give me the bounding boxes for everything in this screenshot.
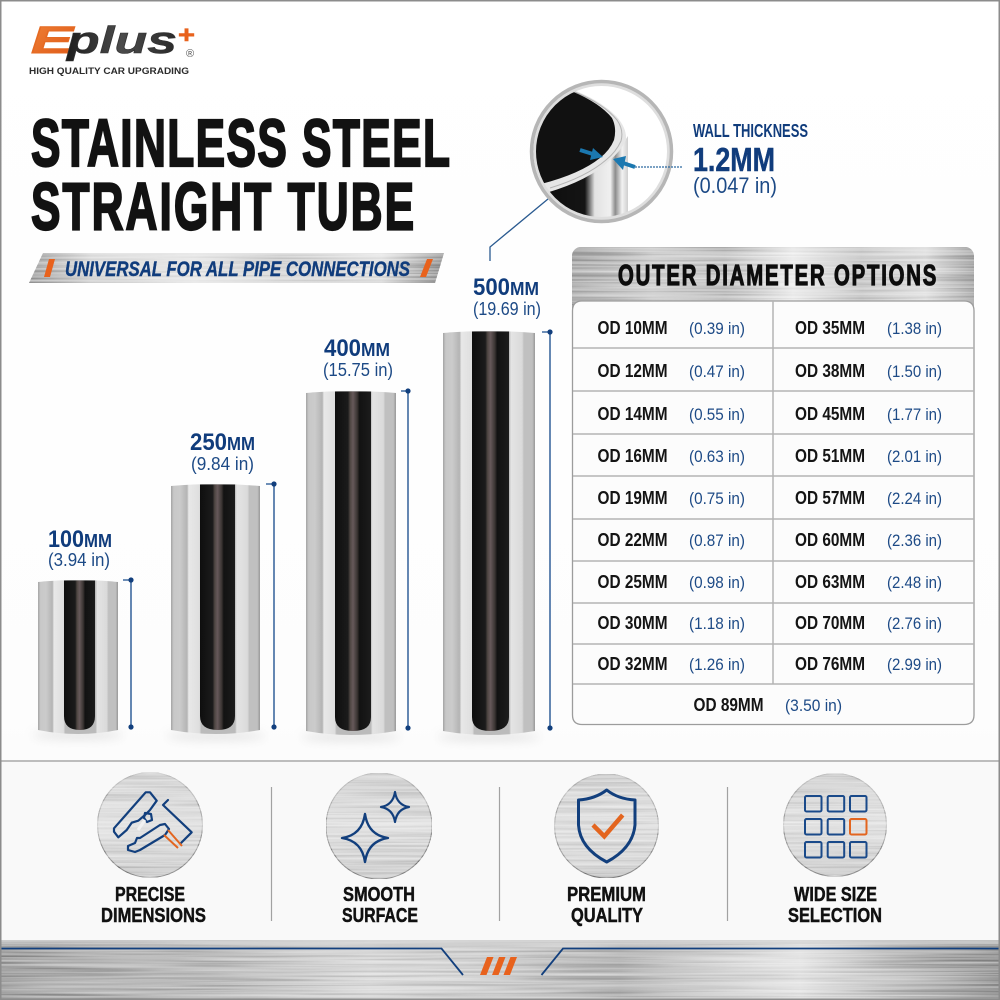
wall thickness callout [693,121,808,198]
left column sizes [598,318,745,674]
right column sizes: (2.24 in) [887,489,942,508]
right column sizes: OD 35MM [795,318,865,338]
left column sizes: (1.18 in) [689,614,745,633]
label: 500mm: (19.69 in) [473,298,541,319]
label: SMOOTH [343,884,415,906]
label: 500mm: MM [510,278,539,299]
table body [572,301,974,724]
dimension line: 100mm [123,577,134,730]
right column sizes: (2.76 in) [887,614,942,633]
label: SURFACE [342,905,418,927]
last row size: (3.50 in) [785,696,842,715]
label: 250mm: (9.84 in) [191,453,254,474]
right column sizes: OD 60MM [795,530,865,550]
right column sizes: (1.77 in) [887,405,942,424]
wall thickness callout: 1.2MM [693,141,775,178]
label: DIMENSIONS [101,905,206,927]
logo: E [31,20,76,62]
wall thickness arrows [580,148,683,170]
banner: universal fit: UNIVERSAL FOR ALL PIPE CONNECTIONS [65,257,411,281]
title [31,107,451,245]
left column sizes: OD 10MM [598,318,668,338]
label [101,884,206,927]
left column sizes: (0.47 in) [689,362,745,381]
left column sizes: OD 22MM [598,530,668,550]
left column sizes: (0.39 in) [689,319,745,338]
right column sizes [795,318,942,674]
tube: 250mm [171,484,260,734]
label: 400mm: 400 [324,335,361,362]
label: SELECTION [788,905,882,927]
icon: size grid [784,774,886,876]
left column sizes: (0.75 in) [689,489,745,508]
dimension line: 250mm [266,481,277,730]
logo [29,20,195,77]
icon: sparkles [326,773,432,879]
left column sizes: (0.55 in) [689,405,745,424]
dimension line: 400mm [401,388,411,731]
left column sizes: OD 19MM [598,488,668,508]
last row size: OD 89MM [694,695,764,715]
logo: ® [186,48,194,60]
logo: HIGH QUALITY CAR UPGRADING [29,66,189,77]
footer band [0,940,1000,1000]
label: PRECISE [115,884,185,906]
label: 500mm [473,274,541,319]
left column sizes: OD 14MM [598,404,668,424]
right column sizes: OD 57MM [795,488,865,508]
icon: orange slashes [480,957,517,975]
panel header [572,247,974,317]
icon: shield [554,774,658,878]
left column sizes: OD 30MM [598,613,668,633]
right column sizes: (1.50 in) [887,362,942,381]
label: 100mm: 100 [48,526,84,553]
right column sizes: OD 76MM [795,654,865,674]
tube: 100mm [38,580,118,734]
zoom lens: wall cross-section [525,82,672,225]
label: 250mm [190,429,255,474]
title: STRAIGHT TUBE [31,170,416,245]
label: QUALITY [571,905,644,927]
label: 400mm: MM [361,339,390,360]
label: 250mm: MM [227,433,255,454]
left column sizes: OD 12MM [598,361,668,381]
right column sizes: OD 51MM [795,446,865,466]
label [567,884,646,927]
label: 100mm [48,526,112,570]
feature: smooth surface [326,773,432,927]
right column sizes: OD 45MM [795,404,865,424]
right column sizes: (1.38 in) [887,319,942,338]
wall thickness callout: (0.047 in) [693,173,777,198]
feature: wide size selection [784,774,886,927]
tube: 400mm [306,391,396,735]
label: 500mm: 500 [473,274,510,301]
dimension line: 500mm [542,329,553,731]
label: 250mm: 250 [190,429,227,456]
label: 100mm: MM [84,530,112,551]
right column sizes: (2.01 in) [887,447,942,466]
label: WIDE SIZE [794,884,877,906]
last row size [694,695,842,715]
panel header: OUTER DIAMETER OPTIONS [618,260,938,292]
left column sizes: (0.98 in) [689,573,745,592]
left column sizes: OD 25MM [598,572,668,592]
right column sizes: OD 63MM [795,572,865,592]
panel: outer diameter options [572,247,974,724]
right column sizes: OD 38MM [795,361,865,381]
wall thickness callout: WALL THICKNESS [693,121,808,141]
left column sizes: (0.87 in) [689,531,745,550]
panel: feature strip [0,760,1000,940]
floor shadow [32,731,541,741]
left column sizes: OD 16MM [598,446,668,466]
logo: + [178,22,195,49]
right column sizes: (2.36 in) [887,531,942,550]
left column sizes: OD 32MM [598,654,668,674]
feature: premium quality [554,774,658,927]
label: 400mm: (15.75 in) [323,359,393,380]
left column sizes: (1.26 in) [689,655,745,674]
label: 400mm [323,335,393,380]
tube: 500mm [443,331,535,735]
right column sizes: (2.99 in) [887,655,942,674]
label [788,884,882,927]
feature: precise dimensions [98,772,206,927]
left column sizes: (0.63 in) [689,447,745,466]
label: 100mm: (3.94 in) [48,549,110,570]
logo: plus [66,20,177,62]
right column sizes: OD 70MM [795,613,865,633]
leader line [490,199,548,261]
label: PREMIUM [567,884,646,906]
icon: caliper [98,772,202,878]
label [342,884,418,927]
title: STAINLESS STEEL [31,107,451,181]
banner: universal fit [29,253,444,283]
right column sizes: (2.48 in) [887,573,942,592]
